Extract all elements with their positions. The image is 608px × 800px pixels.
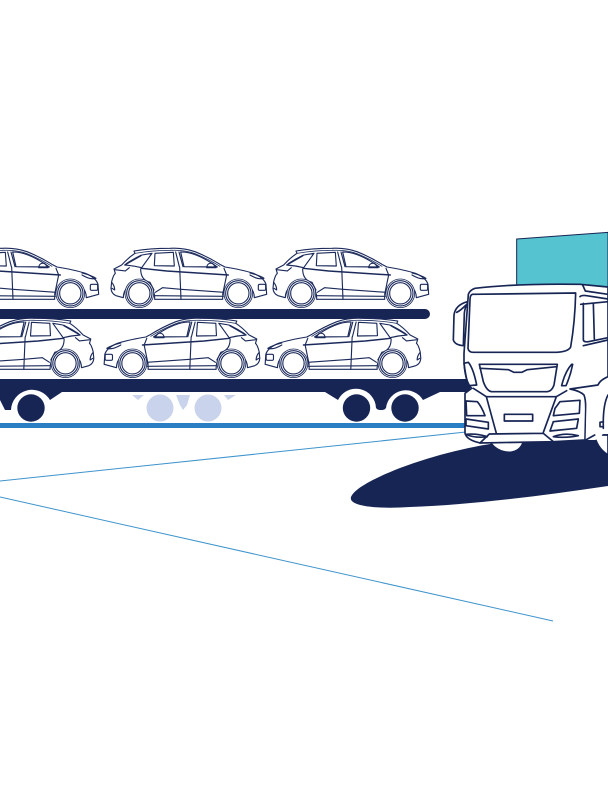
- perspective line upper: [0, 432, 466, 481]
- number plate: [504, 414, 533, 421]
- wheel middle: [343, 394, 370, 422]
- car lower middle: [104, 318, 260, 378]
- car upper left: [0, 248, 99, 308]
- ground shadow: [351, 434, 608, 508]
- mirror: [453, 302, 467, 346]
- perspective line lower: [0, 497, 553, 621]
- rear wheel: [595, 435, 608, 455]
- front wheel: [490, 442, 523, 452]
- grille: [479, 364, 557, 392]
- headlights right: [550, 400, 580, 437]
- windscreen: [468, 293, 576, 352]
- car upper right: [273, 248, 429, 308]
- wheel left: [17, 394, 45, 422]
- cars upper deck: [0, 248, 429, 308]
- car upper middle: [111, 248, 267, 308]
- side window: [580, 285, 608, 346]
- cargo box: [517, 232, 608, 292]
- cars lower deck: [0, 318, 421, 378]
- car lower left: [0, 318, 94, 378]
- truck cab: [453, 232, 608, 455]
- ghost wheels: [132, 394, 236, 422]
- ground line: [0, 423, 470, 428]
- cab side lower: [586, 385, 608, 440]
- headlights left: [466, 401, 488, 437]
- upper deck: [0, 309, 430, 319]
- lamp slot left: [464, 362, 477, 386]
- front bumper frame: [473, 388, 567, 443]
- trailer chassis: [0, 309, 470, 422]
- cab body: [464, 284, 608, 443]
- car lower right: [265, 318, 421, 378]
- wheel right: [391, 394, 419, 422]
- lamp slot right: [562, 364, 573, 386]
